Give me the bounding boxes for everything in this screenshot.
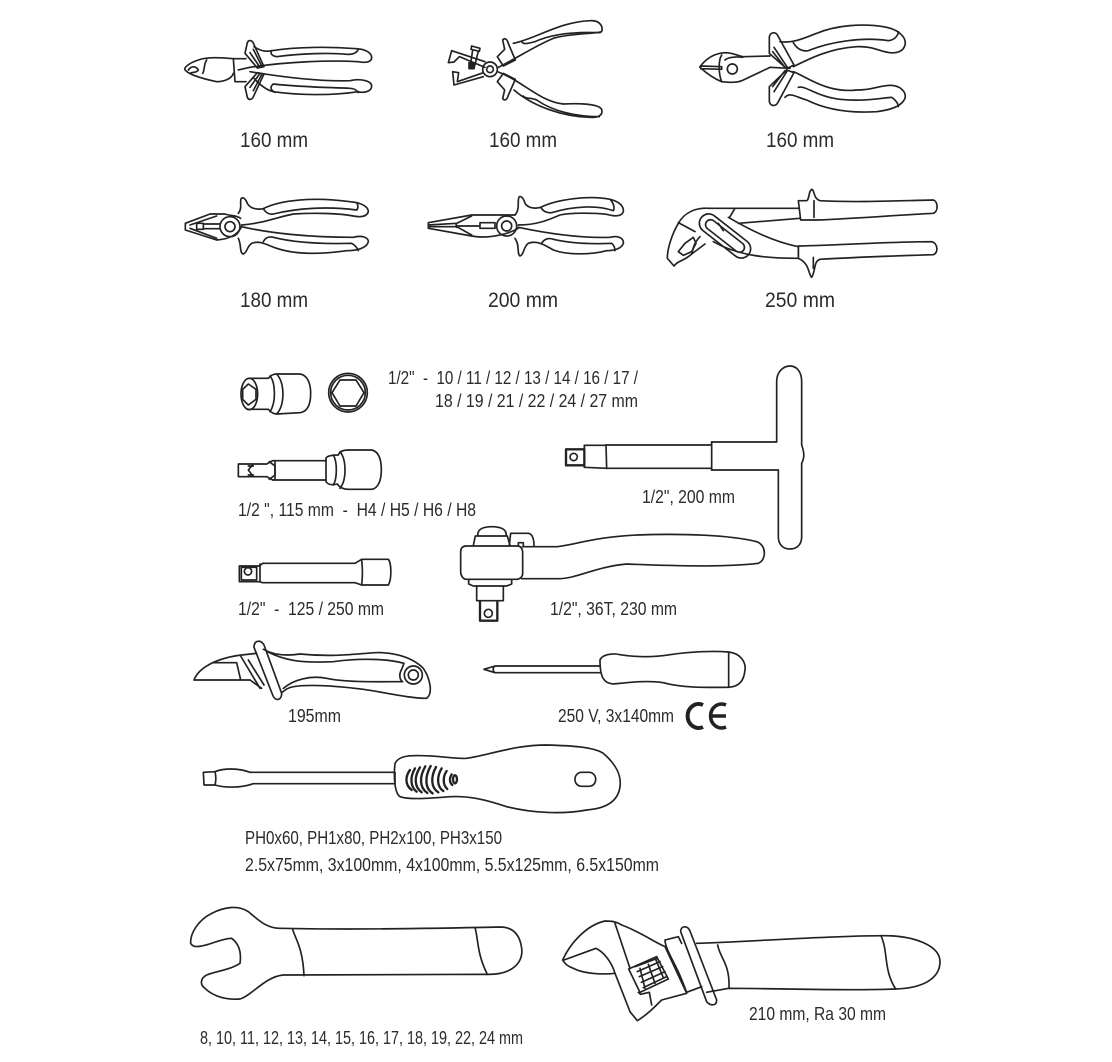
label: long nose pliers size: 200 mm <box>488 289 558 312</box>
label: water pump pliers size: 250 mm <box>765 289 835 312</box>
label: flat screwdriver sizes: 2.5x75mm, 3x100mm, 4x100mm, 5.5x125mm, 6.5x150mm <box>245 854 659 875</box>
icon: combination pliers <box>185 198 368 254</box>
icon: hex bit socket <box>238 450 381 489</box>
icon: diagonal cutter pliers <box>700 25 905 112</box>
icon: extension bar <box>239 559 391 585</box>
icon: T handle <box>566 366 804 549</box>
label: extension bar sizes: 1/2" - 125 / 250 mm <box>238 598 384 619</box>
icon: ratchet <box>461 527 764 621</box>
label: T handle size: 1/2", 200 mm <box>642 486 735 507</box>
label: wire stripper size: 160 mm <box>489 129 557 152</box>
label: socket sizes line 1: 1/2" - 10 / 11 / 12 / 13 / 14 / 16 / 17 / <box>388 367 639 388</box>
icon: insulated open-end wrench <box>191 907 522 999</box>
label: ratchet size: 1/2", 36T, 230 mm <box>550 598 677 619</box>
icon: wire stripper pliers <box>448 21 602 117</box>
icon: CE mark <box>688 704 726 728</box>
icon: water pump pliers <box>667 189 937 277</box>
icon: long nose pliers <box>428 197 623 256</box>
label: Phillips screwdriver sizes: PH0x60, PH1x80, PH2x100, PH3x150 <box>245 827 502 848</box>
icon: socket side and end view <box>241 373 367 414</box>
label: knife size: 195mm <box>288 705 341 726</box>
label: open-end wrench sizes: 8, 10, 11, 12, 13, 14, 15, 16, 17, 18, 19, 22, 24 mm <box>200 1027 523 1048</box>
label: cable cutter size: 160 mm <box>240 129 308 152</box>
label: socket sizes line 2: 18 / 19 / 21 / 22 / 24 / 27 mm <box>435 390 638 411</box>
label: combination pliers size: 180 mm <box>240 289 308 312</box>
label: hex bit socket sizes: 1/2 ", 115 mm - H4 / H5 / H6 / H8 <box>238 499 476 520</box>
icon: adjustable wrench <box>563 921 940 1021</box>
label: adjustable wrench size: 210 mm, Ra 30 mm <box>749 1003 886 1024</box>
icon: flat screwdriver <box>203 745 620 813</box>
icon: electrician knife <box>194 641 430 699</box>
icon: cable cutter pliers <box>185 41 372 99</box>
icon: test screwdriver <box>484 651 745 687</box>
label: test screwdriver size: 250 V, 3x140mm <box>558 705 674 726</box>
label: diagonal cutter size: 160 mm <box>766 129 834 152</box>
